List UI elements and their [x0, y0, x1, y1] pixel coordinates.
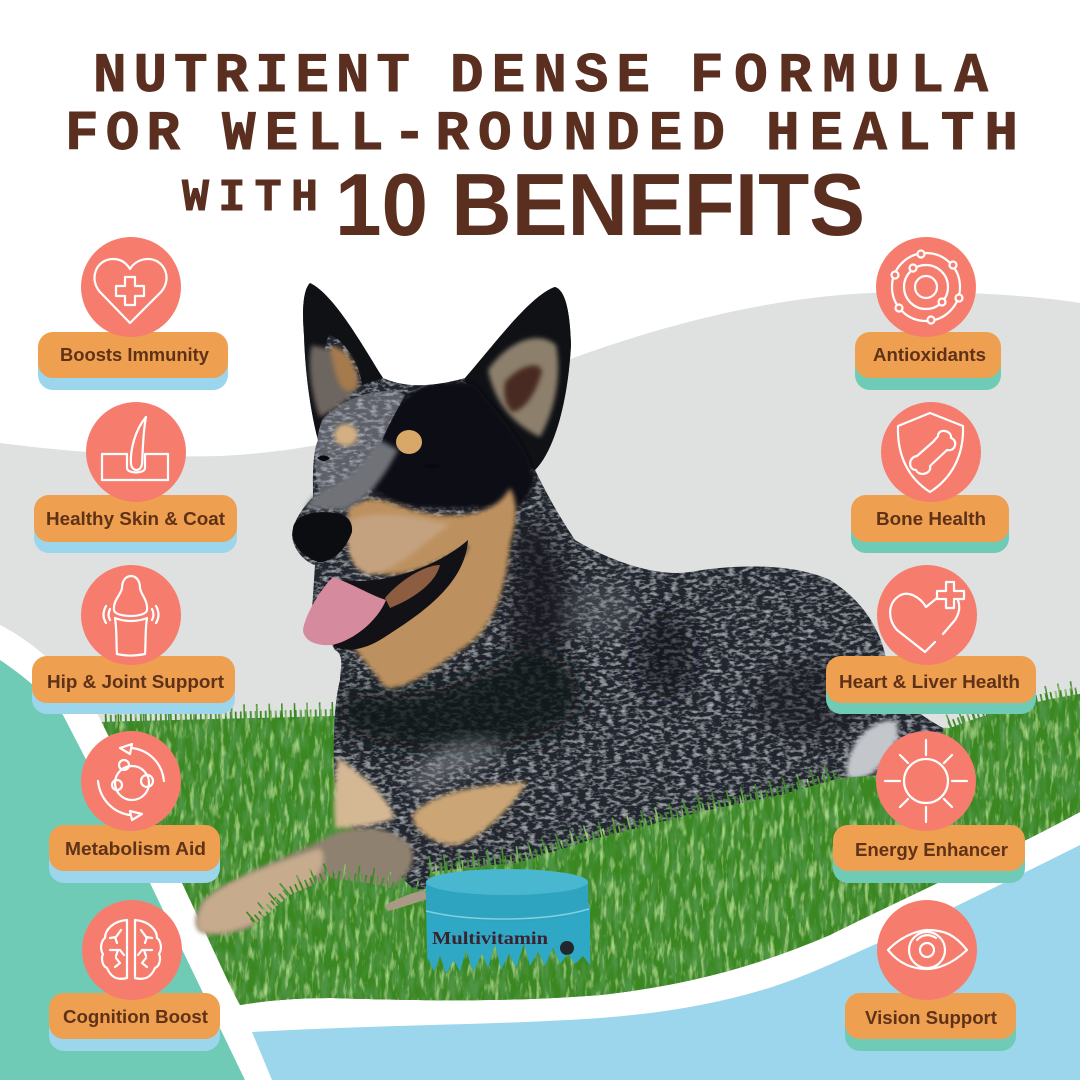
- rear leg light fur: [846, 720, 898, 779]
- benefit: Cognition Boost: [49, 900, 220, 1051]
- label text: Vision Support: [865, 1008, 997, 1028]
- icon: brain: [101, 920, 161, 979]
- label shadow: [845, 1005, 1016, 1051]
- label text: Antioxidants: [873, 345, 986, 365]
- right ear dark inner: [504, 365, 542, 412]
- jar lid: [426, 869, 588, 922]
- label text: Bone Health: [876, 509, 986, 529]
- label pill: [851, 495, 1009, 542]
- front leg tan: [334, 757, 395, 828]
- background: gray wave: [0, 292, 1080, 800]
- dog illustration: [196, 283, 943, 934]
- benefit: Energy Enhancer: [833, 731, 1025, 883]
- label text: Cognition Boost: [63, 1007, 208, 1027]
- title line 1 word 1: NUTRIENT: [93, 44, 410, 108]
- background: blue corner: [252, 845, 1080, 1080]
- icon circle: [881, 402, 981, 502]
- benefit: Heart & Liver Health: [826, 565, 1036, 714]
- black mask: [369, 381, 535, 509]
- title with: WITH: [182, 173, 318, 224]
- icon: hair follicle: [102, 417, 168, 480]
- label text: Heart & Liver Health: [839, 672, 1020, 692]
- benefit: Antioxidants: [855, 237, 1001, 390]
- neck dark shade: [510, 519, 575, 653]
- label text: Healthy Skin & Coat: [46, 509, 225, 529]
- title 10 benefits: 10 BENEFITS: [335, 155, 865, 254]
- label shadow: [32, 668, 235, 714]
- left ear inner: [310, 345, 358, 417]
- label text: Metabolism Aid: [65, 839, 206, 859]
- label text: Boosts Immunity: [60, 345, 209, 365]
- icon circle: [81, 731, 181, 831]
- icon: atom rings: [892, 250, 962, 324]
- benefit: Healthy Skin & Coat: [34, 402, 237, 553]
- icon circle: [876, 731, 976, 831]
- benefit: Hip & Joint Support: [32, 565, 235, 714]
- jar base: [426, 905, 590, 985]
- jar seam: [426, 909, 589, 919]
- benefit: Vision Support: [845, 900, 1016, 1051]
- second paw: [385, 890, 427, 911]
- mouth inner: [385, 565, 440, 608]
- title line 1 word 2: DENSE: [450, 44, 650, 108]
- brow spots: [334, 424, 358, 446]
- label shadow: [855, 344, 1001, 390]
- body grey patch: [562, 584, 638, 636]
- icon: shield with bone: [898, 413, 963, 492]
- right ear inner: [488, 338, 558, 437]
- icon circle: [877, 900, 977, 1000]
- title: [65, 44, 1018, 254]
- jar paw badge: [560, 941, 574, 955]
- icon circle: [86, 402, 186, 502]
- benefit: Metabolism Aid: [49, 731, 220, 883]
- grey forehead: [315, 391, 405, 500]
- icon circle: [877, 565, 977, 665]
- product jar: [424, 869, 592, 992]
- icon: eye: [888, 930, 967, 969]
- icon circle: [81, 237, 181, 337]
- icon circle: [876, 237, 976, 337]
- eyes: [317, 456, 442, 469]
- title line 1 word 3: FORMULA: [690, 44, 988, 108]
- label pill: [826, 656, 1036, 703]
- label pill: [845, 993, 1016, 1039]
- icon: hip joint: [104, 576, 158, 656]
- body dark spot: [635, 610, 695, 700]
- label pill: [49, 825, 220, 871]
- label pill: [38, 332, 228, 378]
- benefit: Bone Health: [851, 402, 1009, 553]
- chest grey patch: [410, 741, 505, 795]
- background: white swoosh and teal corner: [0, 625, 272, 1080]
- forearm fur: [196, 828, 413, 934]
- label pill: [34, 495, 237, 542]
- title line 2 word 1: FOR: [65, 102, 180, 166]
- icon circle: [81, 565, 181, 665]
- icon: heart with plus: [890, 582, 964, 652]
- mouth: [330, 540, 468, 650]
- icon: heart with cross: [94, 259, 167, 323]
- left ear outline black: [303, 283, 383, 440]
- dog body silhouette: [292, 283, 943, 890]
- icon: metabolism cycle: [98, 744, 164, 820]
- label text: Energy Enhancer: [855, 840, 1008, 860]
- grass field: [90, 692, 1080, 1005]
- label shadow: [826, 668, 1036, 714]
- grass over jar: [424, 944, 592, 992]
- label shadow: [851, 507, 1009, 553]
- tongue: [303, 577, 386, 645]
- title line 2 word 2: WELL-ROUNDED: [222, 102, 725, 166]
- right ear outline black: [465, 287, 571, 470]
- grey snout: [305, 440, 398, 510]
- label pill: [855, 332, 1001, 378]
- icon circle: [82, 900, 182, 1000]
- label shadow: [49, 1005, 220, 1051]
- nose: [293, 512, 352, 562]
- label shadow: [38, 344, 228, 390]
- label shadow: [833, 837, 1025, 883]
- label pill: [49, 993, 220, 1039]
- muzzle lighter: [347, 515, 450, 575]
- label pill: [32, 656, 235, 703]
- icon: sun: [885, 740, 967, 822]
- chest tan: [412, 782, 527, 845]
- paw tan: [197, 848, 324, 934]
- title line 2 word 3: HEALTH: [766, 102, 1018, 166]
- label text: Hip & Joint Support: [47, 672, 224, 692]
- label shadow: [34, 507, 237, 553]
- left ear tan: [330, 347, 358, 391]
- muzzle tan: [348, 488, 516, 688]
- benefit: Boosts Immunity: [38, 237, 228, 390]
- label pill: [833, 825, 1025, 871]
- dark neck shade: [340, 640, 581, 752]
- jar label text: Multivitamin: [432, 928, 548, 948]
- jar lid top: [426, 869, 588, 895]
- foreground grass: [225, 760, 1080, 1005]
- label shadow: [49, 837, 220, 883]
- body dark spot 2: [755, 660, 865, 740]
